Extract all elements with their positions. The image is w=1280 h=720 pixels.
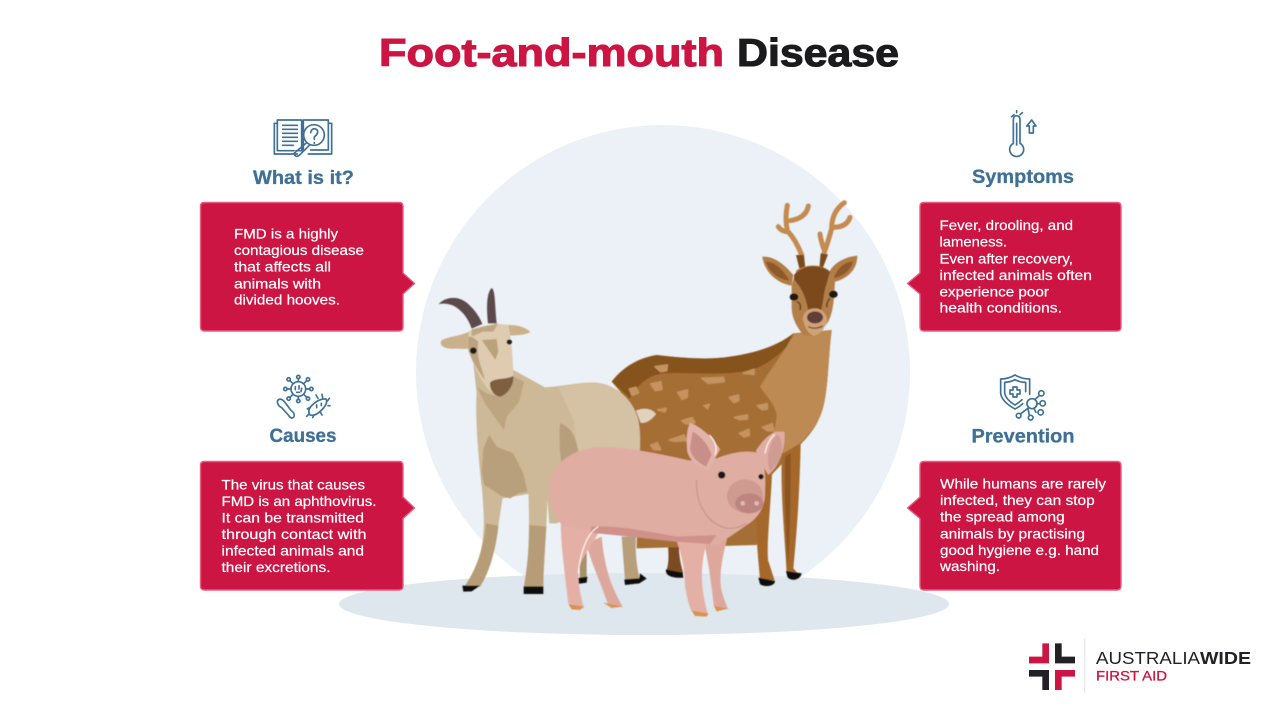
body text: The virus that causes	[222, 477, 365, 492]
background circle	[416, 125, 910, 619]
body text: lameness.	[940, 235, 1007, 250]
heading: symptoms: Symptoms	[972, 167, 1074, 188]
goat tail	[636, 409, 656, 423]
pig snout	[727, 479, 763, 513]
body text: Fever, drooling, and	[940, 218, 1073, 233]
body text: FMD is an aphthovirus.	[222, 494, 376, 509]
body text: good hygiene e.g. hand	[940, 543, 1099, 558]
goat body	[473, 363, 640, 523]
goat head	[468, 324, 513, 396]
icon: logo cross	[1029, 638, 1085, 693]
body text: experience poor	[940, 285, 1050, 300]
deer face	[792, 265, 835, 337]
logo: Australia Wide First Aid	[1029, 638, 1251, 693]
body text: the spread among	[940, 510, 1065, 525]
body text: through contact with	[222, 527, 366, 542]
logo wordmark	[1096, 648, 1251, 684]
body text	[222, 477, 376, 575]
body text: While humans are rarely	[940, 476, 1106, 491]
body text: that affects all	[234, 260, 331, 275]
panel: prevention	[908, 375, 1121, 590]
panel: what is it	[200, 120, 414, 331]
body text: infected animals and	[222, 544, 364, 559]
body text: washing.	[939, 559, 1000, 574]
pig left ear	[687, 423, 720, 471]
body text: infected, they can stop	[940, 493, 1095, 508]
title	[379, 32, 899, 75]
icon: thermometer with arrow	[1010, 111, 1036, 156]
body text	[234, 226, 364, 308]
goat hind legs	[578, 540, 587, 578]
pig right ear	[756, 432, 785, 475]
pig body	[549, 447, 765, 545]
deer	[612, 203, 857, 586]
body text: health conditions.	[940, 301, 1062, 316]
goat legs	[465, 483, 503, 587]
logo wordmark: WIDE	[1200, 648, 1251, 668]
logo wordmark: FIRST AID	[1096, 668, 1167, 684]
panel: symptoms	[908, 111, 1121, 331]
icon: book with magnifier	[274, 120, 332, 156]
body text: contagious disease	[234, 243, 364, 258]
callout box	[908, 202, 1121, 331]
title: Disease	[737, 32, 899, 75]
body text: divided hooves.	[234, 292, 340, 308]
body text: infected animals often	[940, 268, 1092, 283]
callout box	[908, 462, 1121, 590]
title: Foot-and-mouth	[379, 32, 724, 75]
animals illustration	[439, 203, 857, 617]
body text	[940, 218, 1092, 316]
body text	[939, 476, 1106, 574]
pig legs	[587, 537, 623, 607]
deer front legs	[782, 443, 801, 575]
pig	[549, 423, 785, 617]
heading: prevention: Prevention	[972, 426, 1074, 448]
goat ears	[441, 332, 470, 349]
callout box	[200, 462, 414, 590]
deer ears	[762, 257, 793, 286]
panel: causes	[200, 375, 414, 590]
body text: animals with	[234, 276, 321, 291]
goat	[439, 288, 656, 594]
ground shadow ellipse	[339, 573, 949, 635]
deer antlers	[778, 203, 850, 255]
body text: their excretions.	[222, 560, 330, 575]
heading: causes: Causes	[270, 426, 336, 447]
heading: what is it: What is it?	[253, 168, 354, 189]
logo wordmark: AUSTRALIA	[1096, 648, 1200, 668]
goat horns	[439, 298, 482, 329]
icon: virus and bacteria	[277, 375, 330, 418]
body text: Even after recovery,	[940, 251, 1073, 266]
deer chest	[760, 330, 832, 453]
deer spots	[629, 365, 774, 450]
icon: shield and virus	[1001, 375, 1045, 420]
callout box	[200, 202, 414, 331]
body text: animals by practising	[940, 526, 1085, 541]
body text: It can be transmitted	[222, 510, 364, 526]
body text: FMD is a highly	[234, 226, 338, 241]
